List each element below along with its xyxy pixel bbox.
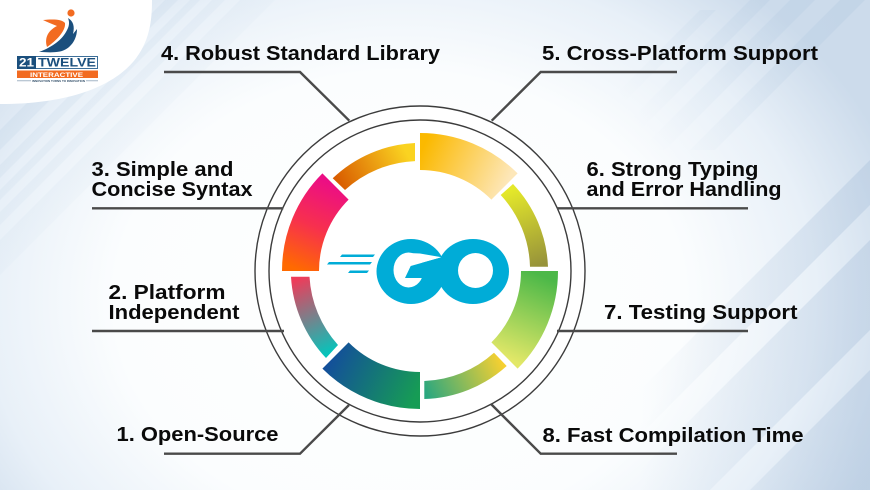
- top-left white logo panel: [0, 0, 152, 104]
- label 3: Concise Syntax: [92, 178, 253, 201]
- label 6: and Error Handling: [586, 178, 782, 201]
- segment: amber thick: [420, 133, 518, 200]
- label 7: 7. Testing Support: [604, 301, 798, 324]
- label 3: 3. Simple and: [92, 158, 234, 181]
- label 6: [586, 158, 782, 201]
- segment: pink-teal thin: [291, 277, 338, 358]
- label 2: [108, 281, 240, 324]
- segment: orange thin: [333, 143, 415, 190]
- Go logo: [327, 239, 509, 304]
- label 2: Independent: [108, 301, 240, 324]
- label 5: 5. Cross-Platform Support: [542, 42, 818, 65]
- logo: 21Twelve Interactive: 21: [19, 58, 35, 70]
- segmented colour ring: [282, 133, 558, 409]
- leader lines: [92, 72, 748, 454]
- inner ring: [269, 120, 571, 422]
- segment: red thick: [282, 173, 349, 271]
- label 1: 1. Open-Source: [116, 423, 278, 446]
- label 2: 2. Platform: [108, 281, 226, 304]
- label 8: 8. Fast Compilation Time: [542, 424, 804, 447]
- segment: green thick: [491, 271, 558, 369]
- segment: blue thick: [322, 342, 420, 409]
- label 3: [92, 158, 253, 201]
- outer white disc: [255, 106, 585, 436]
- logo: 21Twelve Interactive: INNOVATION TURNS TO INNOVATION: [32, 79, 85, 83]
- logo: 21Twelve Interactive: [17, 9, 98, 83]
- label 6: 6. Strong Typing: [586, 158, 758, 181]
- letter O: [437, 239, 509, 304]
- outer ring: [255, 106, 585, 436]
- logo: 21Twelve Interactive: INTERACTIVE: [30, 72, 84, 79]
- speed lines: [327, 254, 375, 273]
- label 4: 4. Robust Standard Library: [161, 42, 441, 65]
- segment: yellow-green thin: [424, 353, 507, 399]
- segment: olive thin: [501, 184, 548, 267]
- logo: 21Twelve Interactive: TWELVE: [38, 58, 96, 70]
- letter G: [376, 239, 446, 304]
